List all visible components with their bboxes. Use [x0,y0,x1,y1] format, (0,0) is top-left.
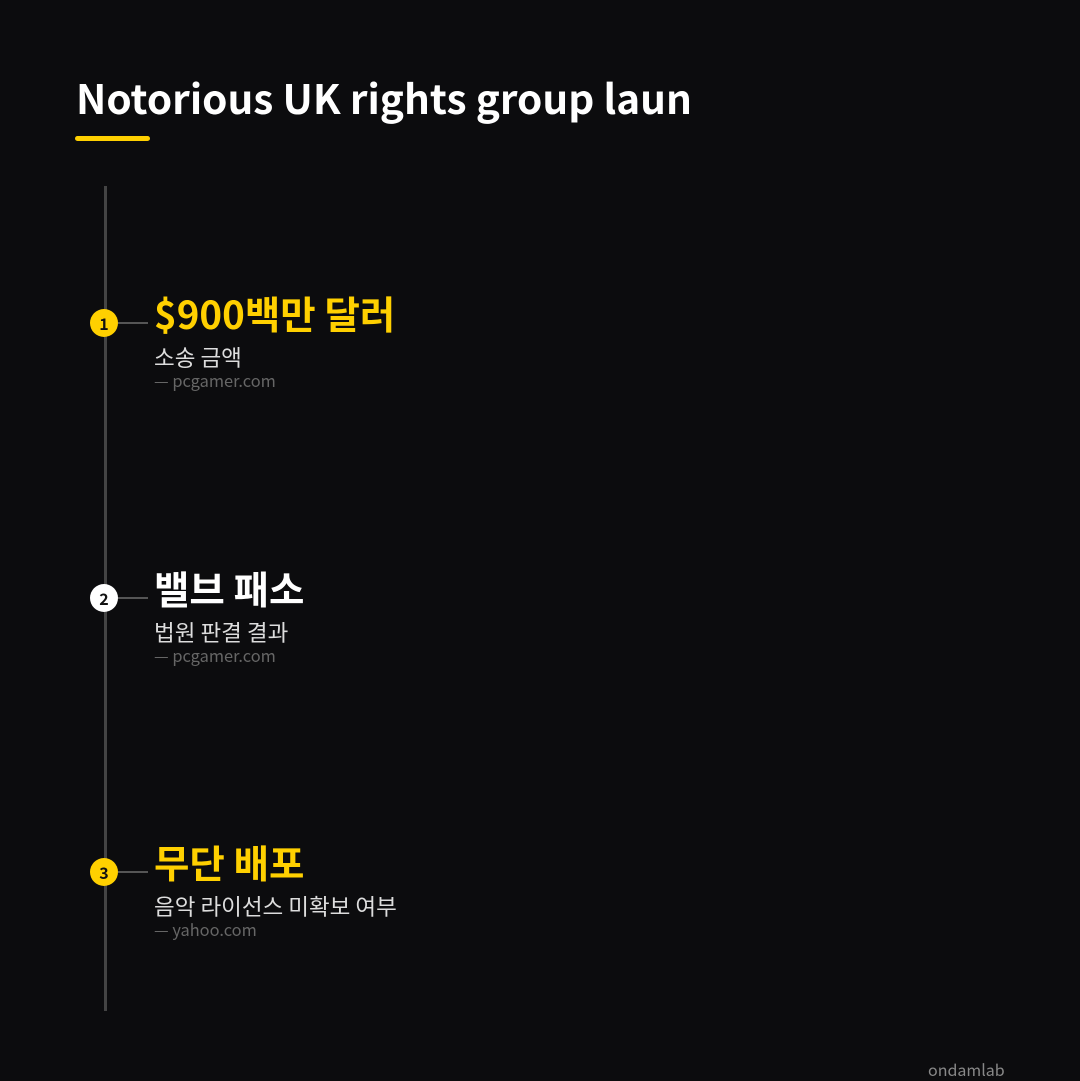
source 2: — pcgamer.com [154,643,276,667]
title underline [75,136,150,141]
subtitle 2: 법원 판결 결과 [154,616,288,648]
marker 1: 1 [99,311,109,335]
marker 3 [90,858,118,886]
marker 2: 2 [99,586,109,610]
footer brand: ondamlab [928,1057,1005,1081]
title: Notorious UK rights group laun [76,67,692,126]
item 1 [90,285,395,392]
heading 3: 무단 배포 [154,834,304,890]
heading 1: $900백만 달러 [154,285,395,341]
item 2 [90,560,304,667]
source 3: — yahoo.com [154,917,257,941]
item 3 [90,834,397,941]
marker 3: 3 [99,860,109,884]
subtitle 1: 소송 금액 [154,341,242,373]
subtitle 3: 음악 라이선스 미확보 여부 [154,890,397,922]
marker 2 [90,584,118,612]
heading 2: 밸브 패소 [154,560,304,616]
marker 1 [90,309,118,337]
timeline line [104,186,107,1011]
source 1: — pcgamer.com [154,368,276,392]
